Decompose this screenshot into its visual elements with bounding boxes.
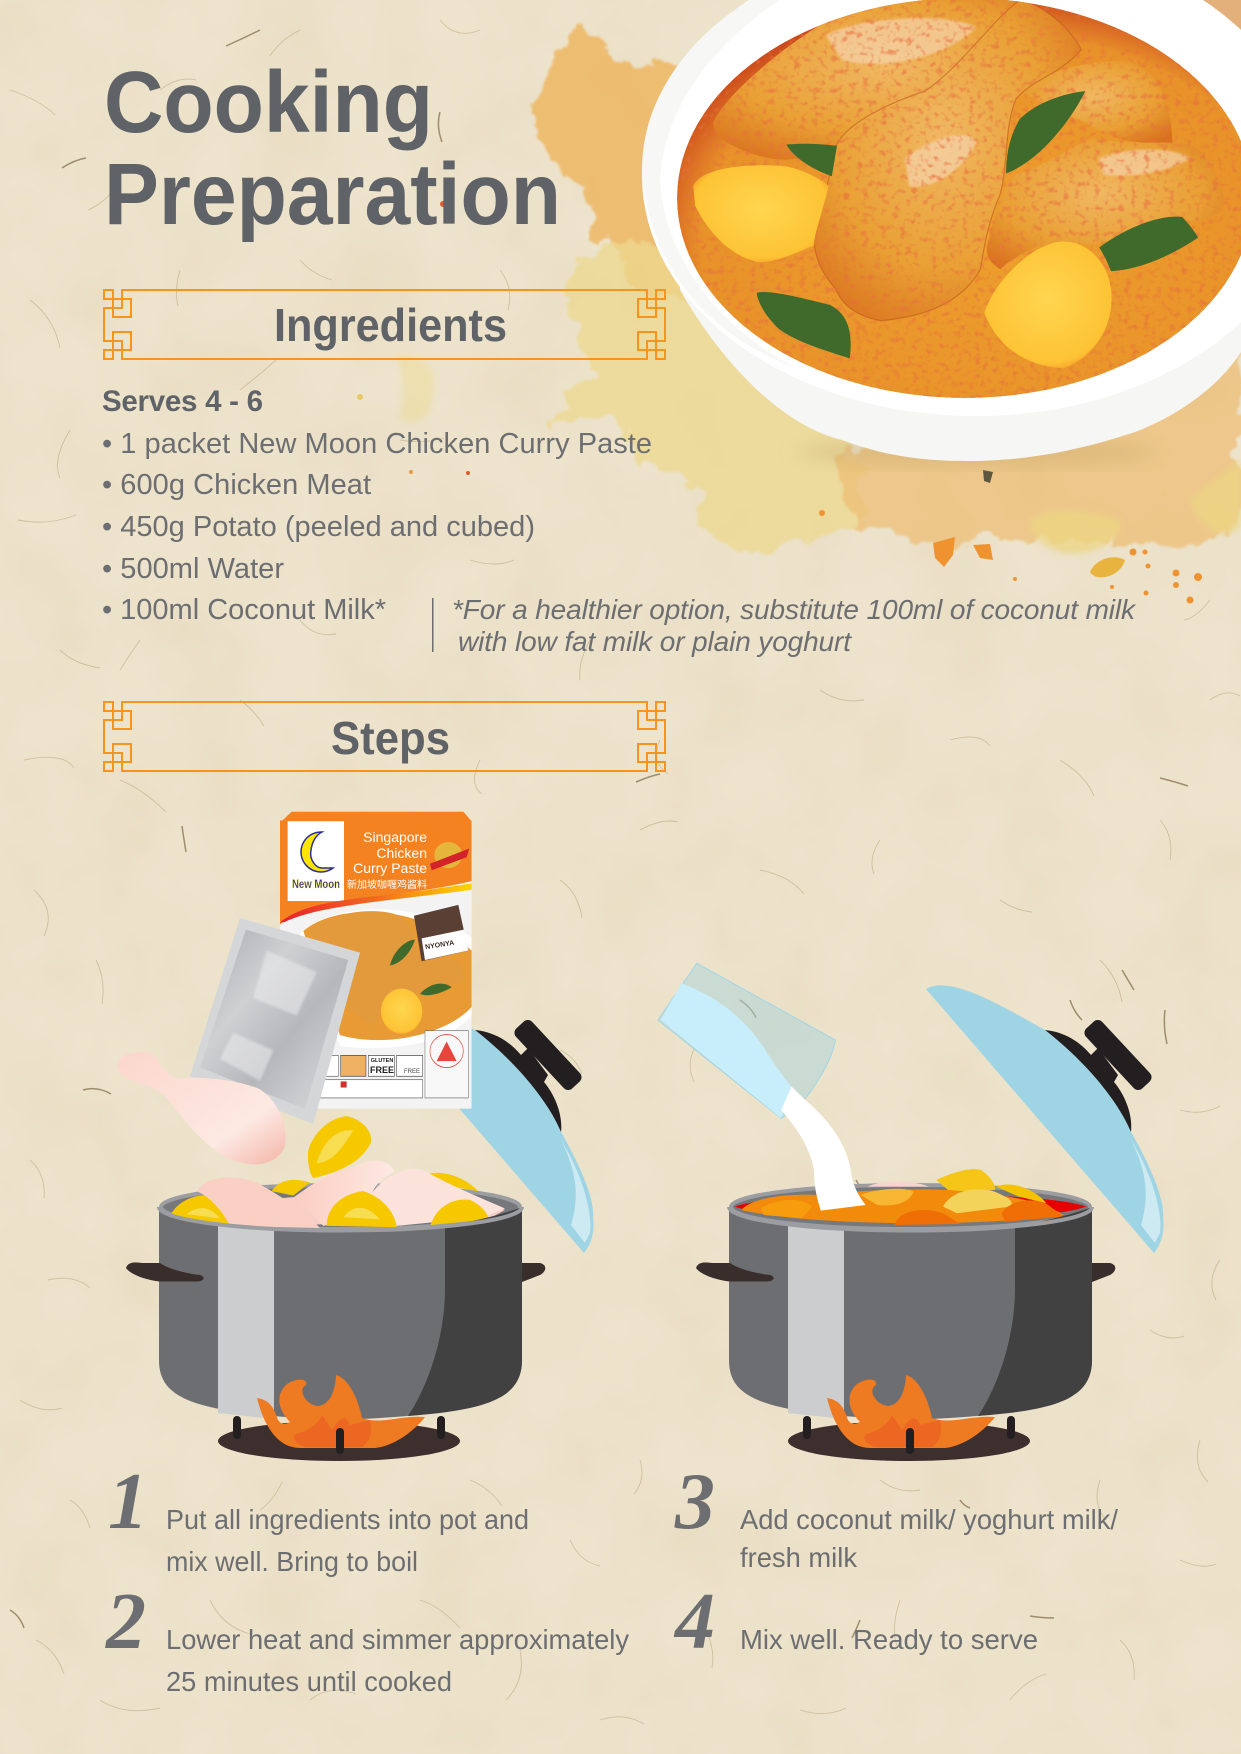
highlights [826, 18, 1190, 187]
falling potato [308, 1116, 371, 1178]
box label text: Singapore [363, 829, 427, 845]
step 1: Put all ingredients into pot and [166, 1504, 529, 1535]
text block: ingredients list [102, 385, 652, 626]
step 3 [674, 1458, 1118, 1573]
panel: steps heading: Steps [331, 712, 450, 764]
corner stain [1190, 0, 1241, 60]
step 3: Add coconut milk/ yoghurt milk/ [740, 1504, 1118, 1535]
step 1 [108, 1458, 529, 1577]
rim shade [642, 0, 800, 370]
step 2 [105, 1578, 629, 1697]
curry contents [735, 1169, 1086, 1225]
text block: ingredients list: • 500ml Water [102, 553, 284, 585]
box label text: GLUTEN [371, 1058, 393, 1064]
icon: glass of milk [658, 963, 866, 1211]
potato right [984, 242, 1112, 368]
pot front with flame [696, 1207, 1092, 1454]
step 1: 1 [108, 1458, 148, 1546]
step 4: 4 [673, 1578, 715, 1666]
text block: ingredients list: Serves 4 - 6 [102, 385, 263, 418]
yellow stain [540, 239, 870, 548]
bowl rim [642, 0, 1241, 416]
milk pour [781, 1087, 866, 1211]
pot contents [172, 1161, 505, 1228]
icon: open lid [926, 985, 1163, 1253]
potato left [693, 165, 829, 262]
panel: ingredients heading: Ingredients [274, 299, 507, 351]
callout: healthier option note: with low fat milk or plain yoghurt [458, 626, 852, 657]
step 4: Mix well. Ready to serve [740, 1624, 1038, 1655]
title: Preparation [104, 146, 561, 243]
pale yellow drip [395, 355, 434, 422]
chicken pieces [1020, 61, 1172, 143]
pot front with flame [126, 1207, 522, 1454]
box label text [292, 829, 455, 1075]
text block: ingredients list: • 100ml Coconut Milk* [102, 594, 386, 626]
text block: ingredients list: • 600g Chicken Meat [102, 469, 371, 501]
leaf back [1006, 91, 1085, 173]
yellow patches on lower stain [1030, 460, 1241, 554]
step 2: 2 [105, 1578, 146, 1666]
step 3: 3 [674, 1458, 715, 1546]
red speckle [680, 0, 1241, 400]
step 2: 25 minutes until cooked [166, 1666, 452, 1697]
text block: ingredients list: • 450g Potato (peeled and cubed) [102, 511, 535, 543]
box label text: FREE [370, 1065, 394, 1075]
box label text: New Moon [292, 879, 340, 891]
dark fleck [983, 470, 993, 483]
curry bowl photo [642, 0, 1241, 466]
leaf lower [757, 292, 851, 358]
box label text: Curry Paste [353, 860, 427, 876]
icon: open lid [356, 985, 593, 1253]
pot back [731, 1185, 1115, 1461]
curry paste box [280, 812, 472, 1109]
curry paste sachet [190, 918, 360, 1124]
curry [677, 0, 1241, 400]
orange stain upper [534, 28, 730, 300]
step 2: Lower heat and simmer approximately [166, 1624, 629, 1655]
box label text: FREE [404, 1069, 420, 1075]
illustration: step 3 pot with milk [658, 963, 1163, 1461]
step 1: mix well. Bring to boil [166, 1546, 418, 1577]
text block: ingredients list: • 1 packet New Moon Chicken Curry Paste [102, 428, 652, 460]
box label text: 新加坡咖喱鸡酱料 [347, 878, 427, 891]
bowl body [680, 250, 1241, 461]
box label text: NYONYA [425, 940, 455, 951]
icon: moon logo [301, 832, 333, 872]
box label text: Chicken [376, 845, 427, 861]
leaf [786, 144, 837, 176]
callout: healthier option note: *For a healthier option, substitute 100ml of coconut milk [452, 594, 1137, 625]
raw drumstick [117, 1052, 286, 1165]
leaf right [1099, 217, 1198, 271]
watercolour stains [357, 0, 1241, 604]
pot back [161, 1185, 545, 1461]
panel: ingredients heading [104, 290, 665, 359]
orange stain lower [838, 340, 1241, 546]
illustration: step 1 pot with ingredients [117, 812, 593, 1461]
title [104, 54, 561, 243]
panel: steps heading [104, 702, 665, 771]
step 4 [673, 1578, 1038, 1666]
splatter [357, 201, 1202, 604]
step 3: fresh milk [740, 1542, 858, 1573]
title: Cooking [104, 54, 433, 151]
drumstick [814, 0, 1081, 321]
callout: healthier option note [432, 594, 1137, 657]
bowl shadow [795, 438, 1155, 466]
